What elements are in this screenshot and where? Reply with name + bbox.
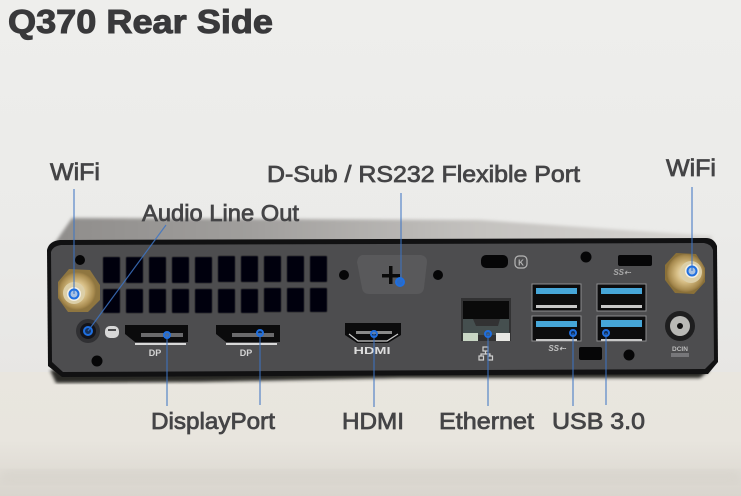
label: HDMI: HDMI bbox=[342, 408, 404, 434]
left WiFi antenna connector bbox=[58, 269, 100, 312]
label: DisplayPort: DisplayPort bbox=[151, 408, 276, 434]
ventilation grille bbox=[103, 256, 327, 313]
callout lines bbox=[74, 187, 692, 407]
USB 3.0 ports bbox=[532, 268, 646, 353]
HDMI port bbox=[345, 323, 401, 357]
label: WiFi left: WiFi bbox=[50, 159, 100, 186]
DisplayPort 1 bbox=[125, 325, 188, 358]
title: Q370 Rear Side bbox=[8, 3, 273, 40]
port marker dots bbox=[70, 266, 696, 338]
D-Sub blanking plate bbox=[357, 255, 427, 294]
right WiFi antenna connector bbox=[665, 253, 705, 294]
DisplayPort 2: DP bbox=[240, 348, 252, 358]
mini PC rear panel bbox=[47, 238, 718, 377]
DisplayPort 2 bbox=[216, 325, 280, 358]
HDMI port: HDMI bbox=[354, 346, 391, 357]
label: D-Sub / RS232 Flexible Port: D-Sub / RS232 Flexible Port bbox=[267, 161, 581, 187]
label: Audio Line Out: Audio Line Out bbox=[142, 200, 300, 226]
kensington lock icon bbox=[515, 256, 527, 268]
USB 3.0 ports: SS⇠ bbox=[613, 268, 632, 277]
label: USB 3.0: USB 3.0 bbox=[552, 408, 645, 434]
kensington lock icon: K bbox=[518, 258, 524, 268]
label: WiFi right: WiFi bbox=[666, 155, 716, 182]
DC-in jack: DCIN bbox=[672, 346, 688, 353]
audio jack bbox=[76, 319, 119, 343]
DC-in jack bbox=[665, 311, 695, 357]
label: Ethernet: Ethernet bbox=[439, 408, 535, 434]
DisplayPort 1: DP bbox=[149, 348, 161, 358]
screw holes bbox=[75, 252, 652, 366]
Ethernet port bbox=[461, 298, 511, 360]
USB 3.0 ports: SS⇠ bbox=[548, 344, 567, 353]
